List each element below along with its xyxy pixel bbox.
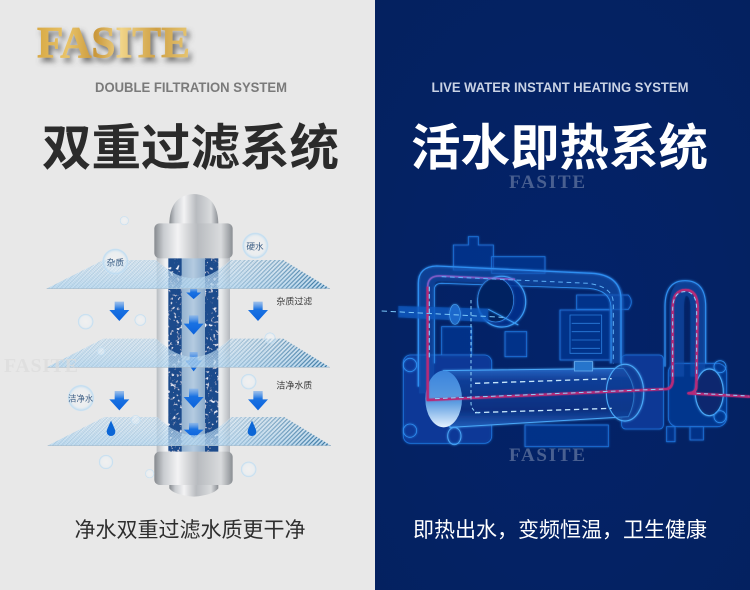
bubble: impurities (102, 248, 129, 275)
housing blocks (403, 237, 727, 447)
arrows inside the cartridge (184, 288, 204, 438)
top ring (478, 276, 526, 327)
right flange (403, 358, 726, 445)
panel: double filtration (4, 27, 338, 540)
bubble: impurities: 杂质 (107, 257, 124, 268)
coil detail (570, 315, 602, 353)
down arrows left and right (109, 302, 268, 410)
water drops (107, 421, 256, 436)
diagram: heating unit (382, 237, 750, 447)
membrane layer 1 (47, 260, 330, 289)
main cylinder (443, 362, 644, 427)
watermark left: FASITE (4, 355, 78, 377)
water pipe frame (418, 266, 621, 393)
flow arrows (382, 277, 748, 413)
label: clean water quality: 洁净水质 (276, 379, 312, 390)
bubble: hard water: 硬水 (246, 241, 264, 252)
caption: cleaner water: 净水双重过滤水质更干净 (74, 519, 306, 542)
heading: double filtration: 双重过滤系统 (42, 121, 339, 176)
heading: instant heating: 活水即热系统 (411, 121, 708, 176)
caption: instant hot water: 即热出水，变频恒温，卫生健康 (413, 519, 707, 542)
logo: FASITE gold: FASITE (37, 18, 190, 67)
panel: live water instant heating (375, 0, 750, 590)
inlet pipe (398, 304, 518, 325)
bubble: clean water (68, 385, 94, 411)
filter cartridge (154, 194, 233, 497)
label: impurity filtering: 杂质过滤 (276, 295, 312, 306)
membrane layer 2 (47, 339, 330, 367)
subtitle: live water: LIVE WATER INSTANT HEATING SYSTEM (432, 79, 688, 95)
return U pipe (665, 281, 706, 377)
membrane layer 3 (48, 417, 331, 446)
bubble: clean water: 洁净水 (68, 393, 94, 403)
diagram: filter cartridge and membranes (47, 194, 331, 497)
bubble: hard water (242, 232, 269, 259)
bubbles (78, 216, 276, 478)
cylinder end cap (425, 371, 462, 427)
hot water line (428, 276, 750, 400)
watermark top: FASITE (509, 172, 585, 193)
subtitle: double filtration system: DOUBLE FILTRATION SYSTEM (95, 79, 287, 95)
watermark bottom: FASITE (509, 445, 585, 466)
